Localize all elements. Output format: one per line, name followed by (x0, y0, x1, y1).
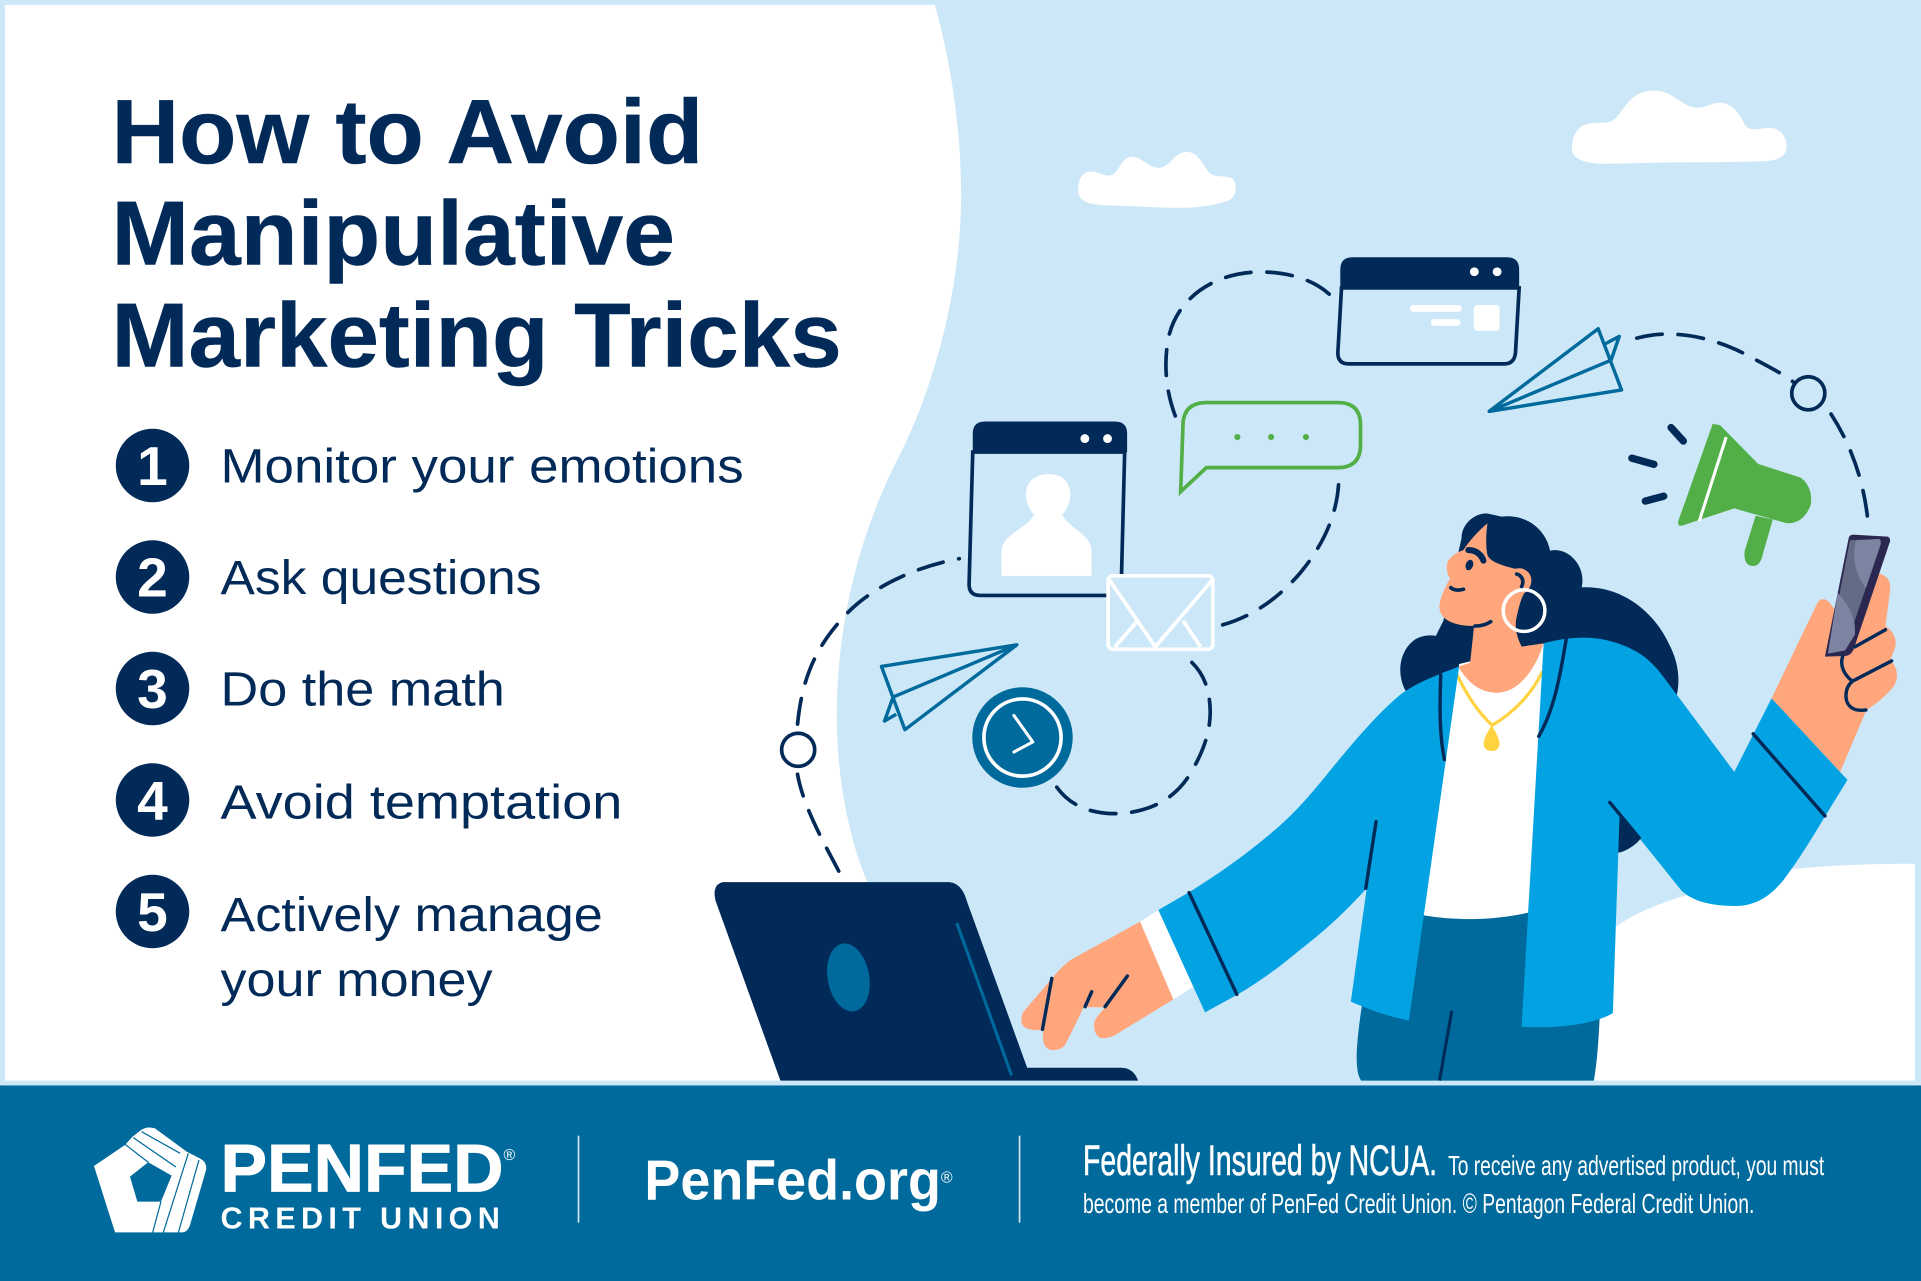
illustration: laptop (715, 882, 1138, 1081)
logo text: PENFED (221, 1131, 504, 1206)
jacket right side and arm (1522, 638, 1847, 1027)
list item 4: 4 (137, 770, 168, 832)
logo text: CREDIT UNION (221, 1201, 500, 1235)
url: PenFed.org (644, 1148, 941, 1211)
list item 2: 2 (137, 547, 168, 609)
logo text: ® (504, 1147, 516, 1164)
icon: browser window top right (1338, 257, 1519, 364)
finger lines (1842, 630, 1892, 710)
list item 5: 5 (137, 881, 168, 943)
cloud: large (1572, 91, 1787, 164)
neck and face (1439, 523, 1543, 693)
earring (1503, 590, 1545, 631)
list item 3: 3 (137, 658, 168, 720)
disclosure text (1083, 1137, 1824, 1219)
footer band (0, 1085, 1921, 1281)
left hand (1021, 922, 1173, 1050)
numbered list (116, 429, 744, 1007)
white hill: lower right (1587, 864, 1915, 1081)
icon: chat bubble (1181, 403, 1361, 492)
list item 4: Avoid temptation (221, 775, 622, 829)
right hand (1772, 573, 1897, 772)
facial features (1451, 550, 1523, 626)
jacket left side and arm (1158, 666, 1459, 1021)
list item 1: 1 (137, 435, 168, 497)
jacket lines (1189, 638, 1825, 994)
list item 2: Ask questions (221, 551, 542, 605)
icon: megaphone (1632, 424, 1811, 566)
panel: white left background (5, 5, 961, 1081)
disclosure text: Federally Insured by NCUA. (1083, 1137, 1437, 1185)
list item 5: your money (221, 953, 493, 1007)
list item 4 (116, 763, 622, 837)
title: How to Avoid (111, 82, 703, 183)
dashed path node circles (782, 377, 1825, 766)
phone (1825, 535, 1890, 657)
hair (1400, 513, 1678, 853)
title: Manipulative (111, 184, 675, 285)
title (111, 82, 842, 386)
list item 3: Do the math (221, 663, 505, 717)
icon: envelope (1108, 576, 1213, 649)
icon: paper plane left (881, 645, 1017, 730)
cloud: small (1078, 152, 1236, 208)
list item 5: Actively manage (221, 888, 603, 942)
logo: PenFed pentagon mark (94, 1127, 206, 1232)
icon: clock (972, 687, 1073, 788)
icon: profile window (969, 421, 1127, 595)
list item 1: Monitor your emotions (221, 440, 744, 494)
title: Marketing Tricks (111, 285, 842, 386)
list item 5 (116, 875, 603, 1007)
list item 1 (116, 429, 744, 502)
shirt (1422, 643, 1546, 919)
logo text (221, 1131, 516, 1235)
necklace (1457, 671, 1542, 751)
icon: paper plane top right (1489, 329, 1622, 411)
list item 2 (116, 540, 542, 614)
pants (1357, 913, 1600, 1081)
left cuff (1140, 910, 1193, 999)
url: ® (941, 1169, 953, 1186)
list item 3 (116, 652, 505, 725)
clouds (1078, 91, 1787, 208)
illustration: woman with phone (1021, 513, 1897, 1081)
dashed motion paths (798, 272, 1868, 871)
